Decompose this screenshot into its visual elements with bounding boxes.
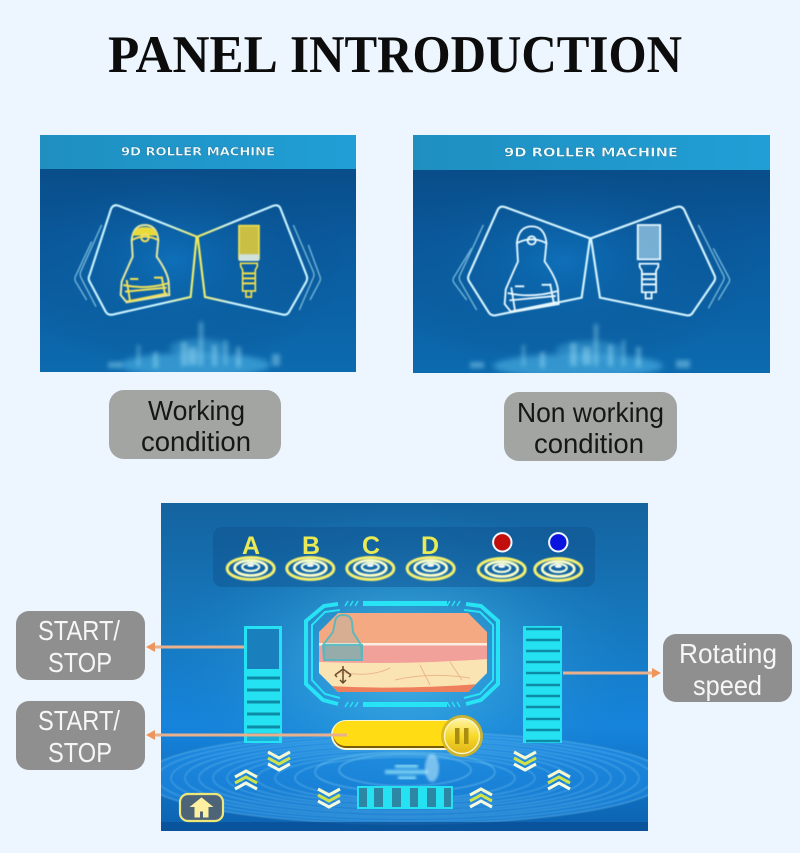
left pentagon frame	[468, 207, 590, 315]
label: rotating speed: speed	[693, 670, 762, 701]
header bar: 9D ROLLER MACHINE	[121, 144, 275, 158]
home button	[180, 794, 223, 821]
red rotation dot	[493, 533, 511, 552]
selection icons	[75, 205, 320, 315]
center up arrows	[470, 789, 492, 807]
center down arrows	[318, 789, 340, 807]
mode letters: A	[242, 532, 260, 560]
title: INTRODUCTION	[290, 26, 682, 84]
idle icons	[453, 207, 730, 315]
roller icon	[239, 226, 259, 297]
arrow: slider to start/stop	[146, 730, 347, 740]
speed chevrons	[235, 752, 570, 807]
label: rotating speed	[663, 634, 792, 702]
label: rotating speed: Rotating	[679, 638, 777, 669]
city glow	[470, 324, 690, 378]
left up arrows	[235, 771, 257, 789]
label: working condition	[109, 390, 281, 459]
header bar	[40, 135, 356, 169]
move cursor icon	[335, 666, 351, 683]
ring buttons	[227, 558, 582, 580]
label: non working condition: Non working	[517, 397, 664, 428]
handpiece icon	[121, 225, 169, 302]
right pentagon frame	[198, 205, 307, 315]
handpiece overlay	[323, 615, 362, 660]
handpiece icon	[505, 226, 559, 312]
mode letters: D	[421, 532, 439, 560]
header bar: 9D ROLLER MACHINE	[504, 146, 678, 160]
right level bar	[524, 627, 561, 742]
bottom level bar	[357, 786, 453, 809]
panel: non working condition screen	[413, 135, 770, 378]
roller icon	[638, 225, 660, 298]
left down arrows	[268, 752, 290, 770]
label: non working condition	[504, 392, 677, 461]
central skin display	[306, 601, 498, 707]
cyan frame	[306, 601, 498, 707]
label: start/stop lower	[16, 701, 145, 770]
label: start/stop upper: STOP	[48, 647, 112, 678]
ripple floor	[143, 732, 667, 831]
arrow: left bar to start/stop	[146, 642, 244, 652]
panel: control screen	[143, 503, 667, 831]
mode letters: B	[302, 532, 320, 560]
right up arrows	[548, 771, 570, 789]
label: working condition: Working	[148, 395, 245, 426]
label: start/stop upper: START/	[38, 615, 120, 646]
label: start/stop lower: START/	[38, 705, 120, 736]
title: PANEL	[108, 26, 277, 84]
header bar	[413, 135, 770, 170]
skin layers	[318, 613, 488, 692]
left pentagon frame	[89, 205, 197, 315]
outer chevrons	[75, 225, 320, 310]
pause knob	[441, 715, 483, 757]
right pentagon frame	[591, 207, 715, 315]
label: start/stop upper	[16, 611, 145, 680]
blue rotation dot	[549, 533, 568, 552]
city glow	[108, 322, 280, 377]
arrow: right bar to rotating speed	[563, 668, 661, 678]
outer chevrons	[453, 225, 730, 310]
label: start/stop lower: STOP	[48, 737, 112, 768]
label: non working condition: condition	[534, 428, 644, 459]
mode button band	[213, 527, 595, 587]
panel: working condition screen	[40, 135, 356, 377]
mode letters: C	[362, 532, 380, 560]
mode letters	[242, 532, 439, 560]
left level bar	[245, 627, 281, 742]
label: working condition: condition	[141, 426, 251, 457]
yellow slider	[331, 715, 483, 757]
right down arrows	[514, 752, 536, 770]
